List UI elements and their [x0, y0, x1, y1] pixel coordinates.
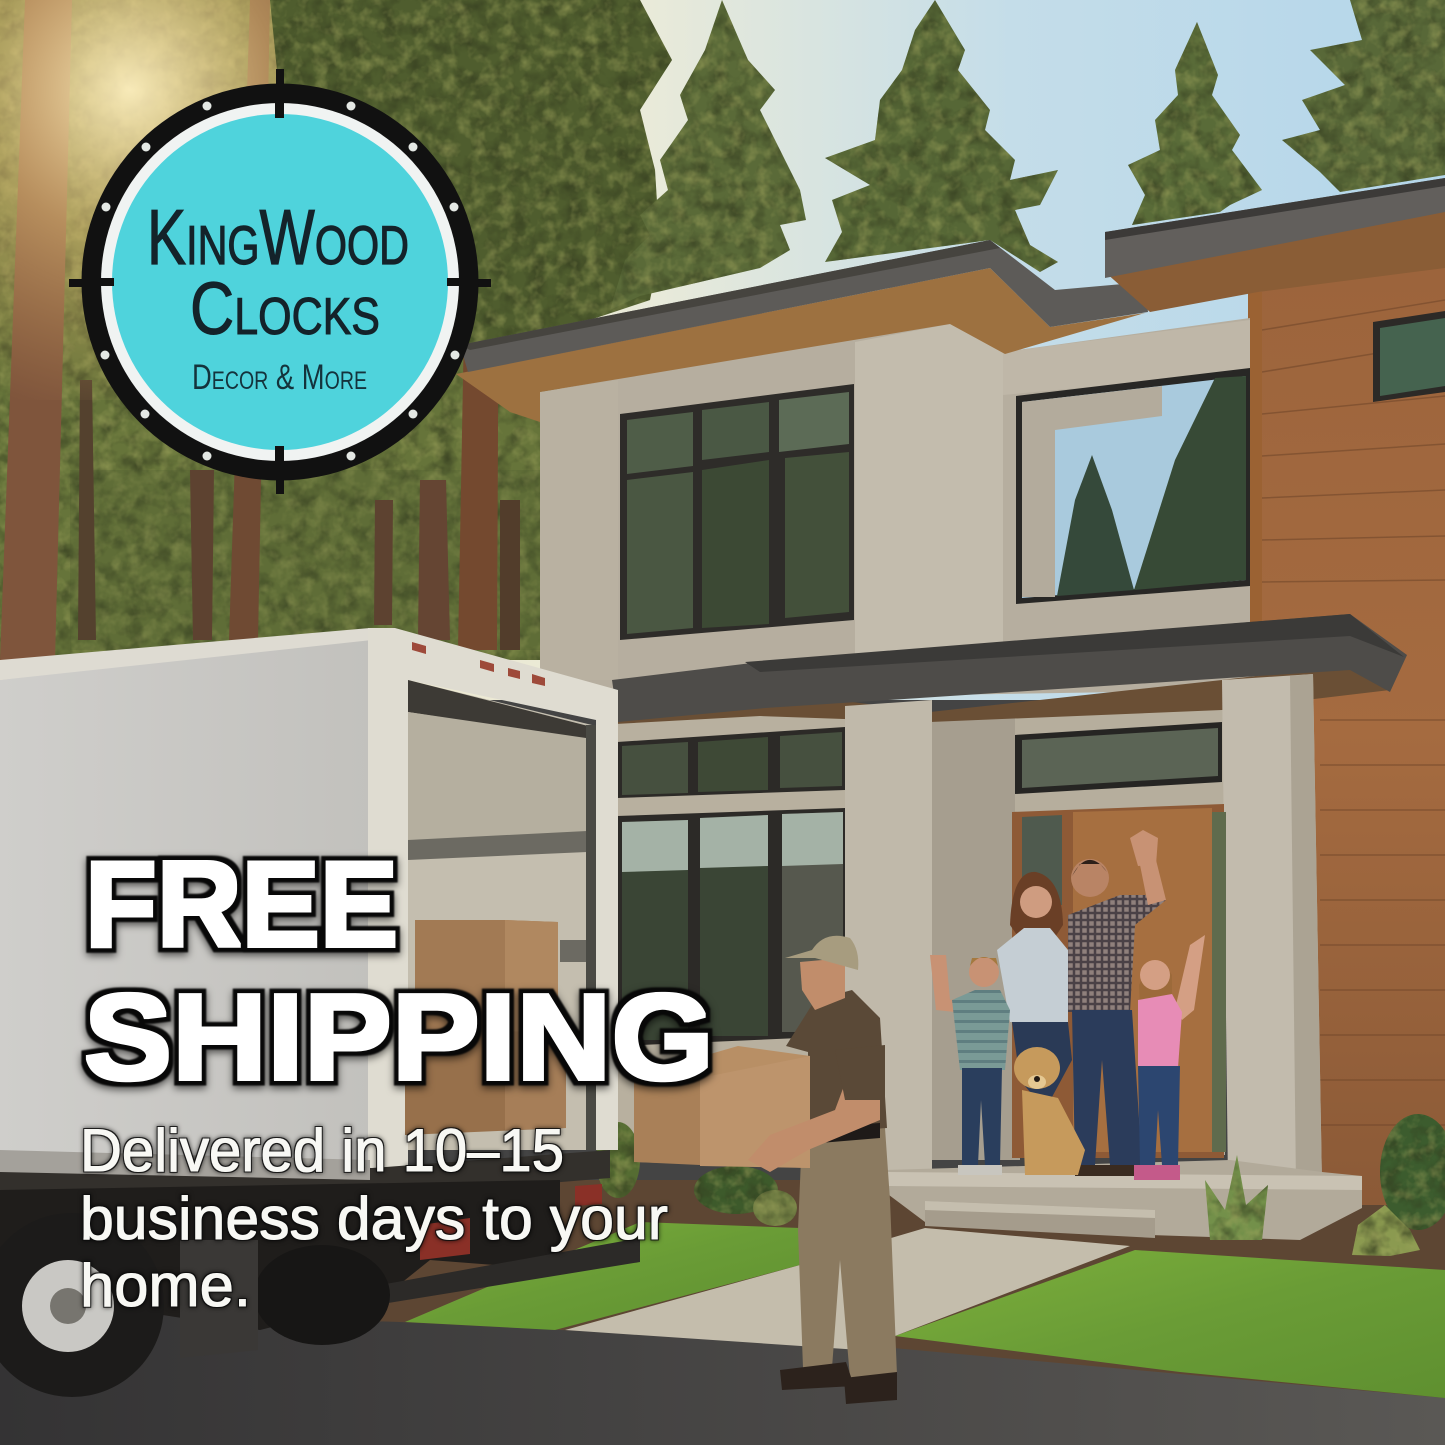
delivery man — [780, 936, 897, 1404]
porch slab and steps — [885, 1160, 1362, 1240]
family on porch — [930, 830, 1205, 1180]
forest background — [0, 0, 560, 660]
subtext line 3: home. — [80, 1252, 251, 1319]
box truck — [0, 628, 640, 1397]
white ring — [101, 103, 459, 461]
delivery subtext — [80, 1117, 668, 1319]
right lawn — [895, 1250, 1445, 1398]
large pine canopy behind roof — [270, 0, 672, 350]
pine trees against sky — [610, 0, 1445, 310]
cargo rail — [408, 831, 587, 860]
walkway — [565, 1228, 1130, 1350]
upper right roof — [1105, 178, 1445, 312]
girl — [1134, 935, 1205, 1180]
father — [1068, 830, 1166, 1176]
black ring — [82, 84, 478, 480]
rear frame — [368, 628, 618, 1170]
rear step bumper — [380, 1238, 640, 1304]
pine 2 — [825, 0, 1058, 272]
tall window — [617, 808, 845, 1046]
logo tagline: Decor & More — [192, 358, 367, 397]
head and neck — [800, 958, 845, 1010]
upper roof with wood soffit — [456, 240, 1148, 422]
golden retriever dog — [1014, 1047, 1085, 1175]
tree trunks — [0, 0, 520, 660]
porch columns — [845, 674, 1322, 1185]
headline line 2: SHIPPING — [84, 969, 714, 1105]
transom window — [617, 727, 845, 798]
lower stucco walls — [610, 698, 1225, 1160]
trousers — [798, 1128, 897, 1378]
wood siding wall — [1248, 262, 1445, 1205]
cap — [785, 936, 858, 970]
upper left window — [620, 384, 854, 640]
logo wordmark: Clocks: Clocks — [190, 267, 380, 350]
front wheel — [0, 1213, 164, 1397]
carried parcel — [634, 1045, 885, 1172]
truck underbody — [0, 1150, 610, 1200]
logo wordmark: KingWood: KingWood — [147, 193, 409, 281]
cargo interior — [408, 680, 592, 1150]
small top-right window — [1373, 311, 1445, 402]
tick marks — [69, 69, 491, 494]
tail lights on roof edge — [412, 642, 545, 686]
headline line 1: FREE — [85, 836, 398, 972]
pine 4 — [1282, 0, 1445, 192]
boy — [930, 955, 1010, 1175]
front door and transom — [1012, 722, 1226, 1158]
driveway road — [0, 1310, 1445, 1445]
left lawn — [405, 1222, 800, 1330]
arm and hand — [748, 1075, 880, 1172]
ring rivets — [100, 102, 460, 460]
truck side panel — [0, 630, 372, 1168]
upper stucco wall — [540, 318, 1250, 700]
sky — [0, 0, 1445, 700]
logo: KingWood Clocks badge — [69, 69, 491, 494]
shrubs — [596, 1114, 1445, 1256]
lower windows — [617, 727, 845, 1046]
subtext line 1: Delivered in 10–15 — [80, 1117, 564, 1184]
pine 1 — [610, 0, 806, 310]
teal face — [112, 114, 448, 450]
cargo boxes — [415, 920, 558, 1036]
upper right window — [1016, 368, 1250, 604]
headline: FREE SHIPPING — [84, 836, 714, 1105]
boots — [780, 1362, 897, 1404]
shirt — [786, 990, 887, 1134]
ground fill — [0, 1180, 1445, 1445]
rear wheels — [254, 1245, 390, 1345]
mother — [997, 872, 1072, 1110]
pine 3 — [1128, 22, 1262, 225]
subtext line 2: business days to your — [80, 1185, 668, 1252]
porch roof — [612, 614, 1407, 724]
